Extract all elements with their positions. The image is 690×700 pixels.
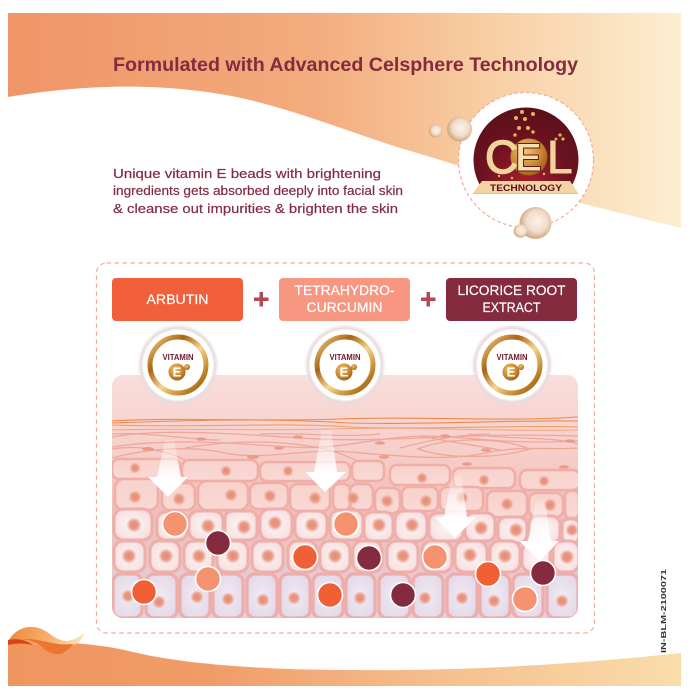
technology banner [473, 181, 578, 193]
gold sparkle dots [498, 110, 565, 179]
upper skin layers [112, 432, 578, 462]
vitamin E bead 3: VITAMIN [496, 352, 528, 362]
ingredient dots: maroon (licorice) [206, 530, 556, 608]
bottom gradient band [8, 642, 681, 686]
vitamin E bead 3 [471, 324, 553, 406]
vitamin E bead 1: E [173, 364, 182, 380]
title: Formulated with Advanced Celsphere Technology [113, 54, 578, 76]
ingredient: tetrahydrocurcumin [279, 278, 410, 321]
ingredient: licorice root extract: LICORICE ROOT [458, 283, 566, 298]
top gradient band [8, 13, 681, 228]
description text: ingredients gets absorbed deeply into facial skin [113, 183, 403, 198]
CEL letters [485, 131, 573, 183]
CEL letters: C [485, 131, 518, 183]
arrow 3 [435, 475, 476, 538]
cell row 5 [113, 574, 578, 618]
ingredient: arbutin [112, 278, 243, 321]
cell row 1 [112, 459, 580, 490]
vitamin E bead 3: E [507, 364, 516, 380]
cell nuclei [121, 462, 579, 609]
flat nuclei of upper layers [142, 434, 575, 469]
ingredient: arbutin: ARBUTIN [146, 292, 208, 307]
vitamin E bead 2: VITAMIN [330, 352, 360, 362]
arrow 4 [519, 500, 559, 561]
badge maroon emblem [474, 108, 578, 185]
vitamin E bead 2: E [340, 364, 349, 380]
ingredient dots: light (tetrahydrocurcumin) [162, 512, 538, 612]
logo swoosh [8, 627, 84, 654]
description text: & cleanse out impurities & brighten the skin [113, 201, 398, 216]
skin cross-section [112, 375, 580, 618]
description text [113, 166, 403, 216]
ingredient: tetrahydrocurcumin: TETRAHYDRO- [294, 283, 394, 298]
plus sign [421, 292, 436, 306]
product code: IN-BLM-2100071 [659, 569, 668, 653]
vitamin E bead 2 [304, 324, 386, 406]
cell row 4 [114, 541, 579, 572]
arrow 1 [148, 440, 188, 497]
CEL technology badge [458, 92, 594, 228]
CEL letters: L [547, 131, 573, 183]
ingredient: tetrahydrocurcumin: CURCUMIN [306, 300, 382, 315]
description text: Unique vitamin E beads with brightening [113, 166, 381, 181]
ingredient dots: orange (arbutin) [132, 544, 500, 608]
technology label: TECHNOLOGY [490, 183, 563, 194]
pearls [429, 116, 552, 239]
ingredient: licorice root extract: EXTRACT [482, 300, 540, 315]
ingredient: licorice root extract [446, 278, 577, 321]
orange surface lines [112, 417, 578, 430]
badge dashed circle [458, 92, 594, 228]
plus sign [254, 292, 268, 306]
CEL letters: E [515, 136, 542, 180]
vitamin E bead 1 [137, 324, 219, 406]
arrow 2 [305, 430, 346, 492]
panel: ingredients dashed frame [96, 263, 594, 633]
cell row 3 [114, 509, 579, 543]
vitamin E bead 1: VITAMIN [162, 352, 194, 362]
cell row 2 [115, 479, 579, 518]
